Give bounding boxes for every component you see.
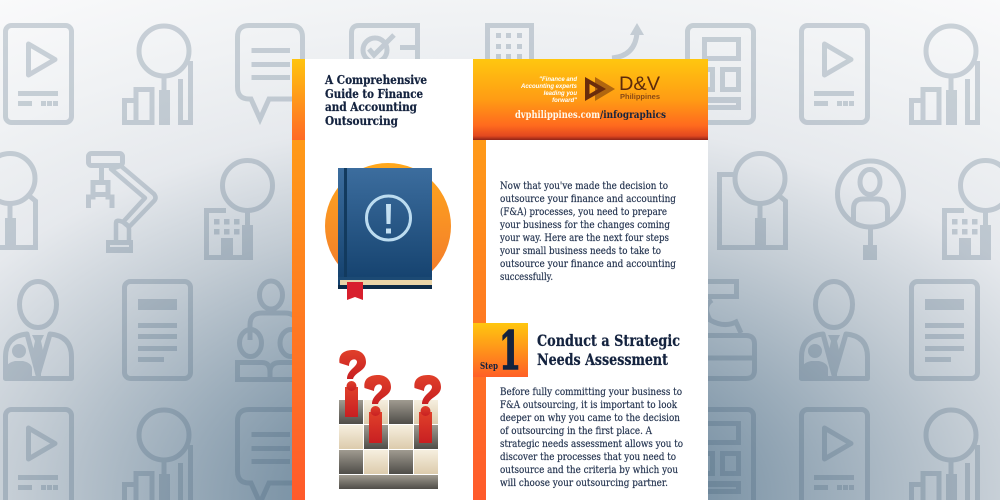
pawn with question mark 1 bbox=[339, 350, 366, 417]
icon: checklist bbox=[352, 26, 420, 62]
icon: businessman, row 3 bbox=[6, 282, 72, 381]
logo bbox=[585, 74, 660, 101]
website url: dvphilippines.com bbox=[515, 109, 600, 121]
icon: document, row 3 bbox=[124, 282, 190, 378]
step 1 text: will choose your outsourcing partner. bbox=[500, 477, 668, 489]
chess board bbox=[339, 400, 438, 489]
icon: businessman, row 3 right bbox=[802, 282, 868, 381]
icon: magnifier chart, row 1 right bbox=[912, 26, 978, 125]
icon: person in magnifier bbox=[838, 161, 904, 260]
icon: video document, row 4 right bbox=[802, 410, 868, 500]
icon: growth arrow bbox=[612, 23, 644, 58]
step 1 text: strategic needs assessment allows you to bbox=[500, 438, 683, 450]
logo: D&V bbox=[619, 74, 660, 95]
step 1 text: Before fully committing your business to bbox=[500, 386, 682, 398]
icon: magnifier chart, row 4 right bbox=[912, 410, 978, 500]
step 1 heading bbox=[537, 331, 680, 369]
pawn with question mark 3 bbox=[414, 375, 441, 443]
step 1 text: discover the processes that you need to bbox=[500, 451, 676, 463]
icon: speech bubble, row 1 bbox=[238, 26, 302, 119]
icon: magnifier building, row 2 right bbox=[944, 160, 1000, 260]
icon: page layout, row 4 bbox=[688, 410, 754, 500]
icon: book with alert bbox=[325, 163, 451, 300]
icon: document, row 3 right bbox=[912, 282, 978, 378]
website url: /infographics bbox=[600, 109, 666, 121]
step 1 text bbox=[500, 386, 683, 489]
icon: speech bubble, row 4 bbox=[238, 410, 302, 500]
step 1 heading: Needs Assessment bbox=[537, 350, 668, 369]
intro text: Now that you've made the decision to bbox=[500, 180, 668, 192]
title: Guide to Finance bbox=[325, 86, 423, 101]
step 1 heading: Conduct a Strategic bbox=[537, 331, 680, 350]
intro text bbox=[499, 180, 676, 283]
step 1 text: of outsourcing in the first place. A bbox=[500, 425, 652, 437]
logo: Philippines bbox=[620, 92, 660, 101]
tagline: leading you bbox=[544, 91, 577, 97]
icon: robot arm bbox=[88, 154, 156, 253]
pawn with question mark 2 bbox=[364, 375, 391, 443]
icon: magnifier chart, row 4 bbox=[124, 410, 190, 500]
icon: chess board with question marks bbox=[339, 350, 441, 489]
panel: infographic sheet bbox=[292, 59, 708, 500]
tagline bbox=[520, 77, 578, 104]
icon: magnifier chart, row 1 bbox=[124, 26, 190, 125]
intro text: outsource your finance and accounting bbox=[500, 258, 676, 270]
intro text: your business for the changes coming bbox=[499, 219, 670, 231]
title: Outsourcing bbox=[325, 113, 398, 128]
tagline: "Finance and bbox=[539, 77, 577, 83]
icon: magnifier document, row 2 right bbox=[720, 154, 786, 250]
icon: seated group bbox=[238, 281, 302, 380]
title bbox=[324, 72, 427, 128]
step 1 text: F&A outsourcing, it is important to look bbox=[500, 399, 678, 411]
title: and Accounting bbox=[325, 99, 417, 114]
tagline: Accounting experts bbox=[520, 84, 578, 90]
step 1 text: deeper on why you came to the decision bbox=[500, 412, 680, 424]
icon: video document, row 1 right bbox=[802, 26, 868, 122]
intro text: (F&A) processes, you need to prepare bbox=[500, 206, 667, 218]
icon: video document, row 1 bbox=[6, 26, 72, 122]
header banner bbox=[473, 59, 708, 140]
step 1 badge: 1 bbox=[499, 321, 521, 382]
icon: person at desk bbox=[690, 282, 754, 378]
intro text: your way. Here are the next four steps bbox=[499, 232, 669, 244]
step 1 badge: Step bbox=[480, 362, 498, 372]
icon: magnifier building, row 2 bbox=[206, 160, 272, 260]
icon: building bbox=[485, 23, 534, 60]
icon: magnifier document, row 2 left bbox=[0, 154, 36, 250]
step 1 text: outsource and the criteria by which you bbox=[500, 464, 678, 476]
intro text: successfully. bbox=[500, 271, 553, 283]
intro text: outsource your finance and accounting bbox=[500, 193, 676, 205]
intro text: your small business needs to take to bbox=[499, 245, 661, 257]
step 1 badge bbox=[473, 321, 528, 382]
icon: video document, row 4 bbox=[6, 410, 72, 500]
tagline: forward" bbox=[552, 98, 577, 104]
icon: page layout, row 1 bbox=[688, 26, 754, 122]
title: A Comprehensive bbox=[324, 72, 427, 87]
